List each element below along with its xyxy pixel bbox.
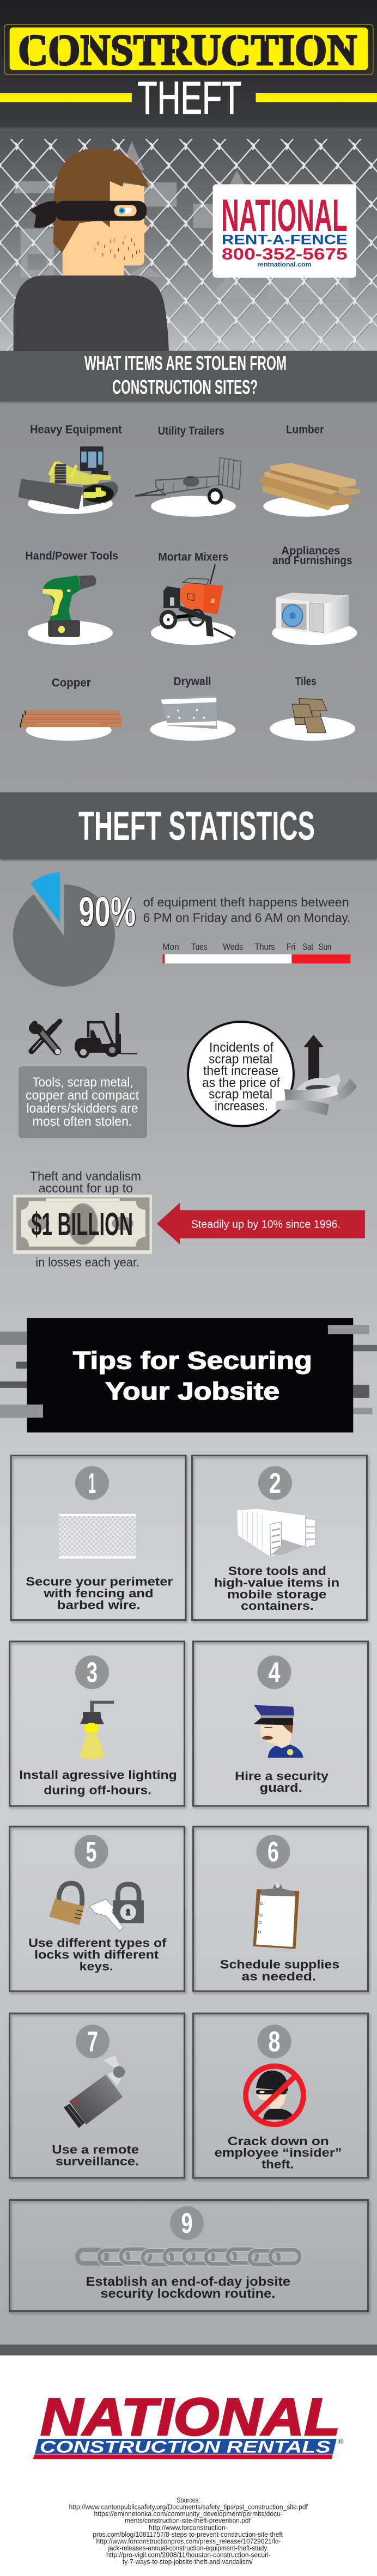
item: utility trailers: Utility Trailers bbox=[158, 425, 224, 437]
tip card 5: locks: locks with different bbox=[34, 1948, 159, 1961]
callout circle: scrap metal: as the price of bbox=[202, 1076, 280, 1090]
item: appliances and furnishings: Appliances bbox=[281, 545, 340, 557]
heading: tips for securing your jobsite bbox=[0, 1318, 377, 1432]
footer band bbox=[0, 2345, 377, 2355]
tip card 4: security guard: Hire a security bbox=[235, 1769, 329, 1783]
week timeline bar: Sat bbox=[302, 942, 313, 952]
tip card 6: schedule supplies: Schedule supplies bbox=[220, 1958, 339, 1971]
statistic text: weekend theft bbox=[143, 896, 350, 925]
sign: National Rent-A-Fence bbox=[213, 184, 356, 278]
tip card 1: fencing: with fencing and bbox=[43, 1586, 154, 1600]
sources: ty-7-ways-to-stop-jobsite-theft-and-vandalism/ bbox=[123, 2557, 253, 2566]
heading: Theft Statistics bbox=[0, 792, 377, 858]
callout: tools most often stolen: Tools, scrap metal, bbox=[33, 1075, 133, 1090]
week timeline bar: Mon bbox=[162, 942, 179, 952]
pie chart: 90%: 90% bbox=[78, 888, 136, 935]
logo: National Construction Rentals: CONSTRUCTION RENTALS bbox=[40, 2438, 331, 2457]
tip card 5: locks: keys. bbox=[80, 1960, 113, 1973]
sources: https://eminnetonka.com/community_development/permits/docu- bbox=[94, 2510, 283, 2518]
callout circle: scrap metal bbox=[188, 1022, 294, 1126]
thief illustration bbox=[14, 148, 169, 351]
tip card 1: fencing bbox=[11, 1455, 186, 1620]
arrow: price up bbox=[303, 1035, 324, 1084]
item: hand/power tools bbox=[25, 550, 118, 645]
callout circle: scrap metal: Incidents of bbox=[209, 1040, 273, 1055]
callout: tools most often stolen: most often stolen. bbox=[33, 1114, 132, 1129]
tip card 4: security guard: guard. bbox=[260, 1781, 302, 1794]
item: drywall: Drywall bbox=[174, 676, 211, 688]
heading: tips for securing your jobsite: Tips for Securing bbox=[73, 1346, 312, 1374]
tip card 3: lighting: during off-hours. bbox=[44, 1783, 151, 1797]
arrow: steadily up: Steadily up by 10% since 1996. bbox=[191, 1218, 340, 1230]
tip card 4: security guard bbox=[193, 1641, 368, 1806]
tip card 2: storage containers: containers. bbox=[241, 1599, 314, 1613]
item: lumber: Lumber bbox=[286, 424, 324, 436]
tip card 5: locks: Use different types of bbox=[28, 1936, 167, 1950]
tip card 6: schedule supplies bbox=[193, 1827, 368, 1991]
tip card 4: security guard: 4 bbox=[268, 1657, 281, 1688]
statistic text: weekend theft: of equipment theft happens between bbox=[143, 896, 349, 909]
text: theft and vandalism bbox=[30, 1169, 141, 1195]
tip card 7: remote surveillance: 7 bbox=[87, 2026, 98, 2058]
banknote: $1 billion: $1 BILLION bbox=[31, 1206, 133, 1242]
item: copper: Copper bbox=[52, 677, 91, 689]
tip card 2: storage containers: Store tools and bbox=[228, 1564, 326, 1578]
tip card 6: schedule supplies: 6 bbox=[267, 1836, 279, 1868]
tip card 1: fencing: 1 bbox=[88, 1468, 96, 1499]
tip card 8: insider theft bbox=[193, 2013, 368, 2178]
text: theft and vandalism: account for up to bbox=[39, 1181, 133, 1195]
text: theft and vandalism: Theft and vandalism bbox=[30, 1169, 141, 1183]
week timeline bar: Weds bbox=[223, 942, 243, 952]
item: mortar mixers bbox=[151, 551, 236, 645]
tip card 9: lockdown routine bbox=[10, 2200, 368, 2311]
tip card 3: lighting: Install agressive lighting bbox=[19, 1768, 177, 1782]
tip card 9: lockdown routine: security lockdown routine. bbox=[100, 2287, 275, 2301]
callout circle: scrap metal: scrap metal bbox=[209, 1052, 272, 1066]
icon: forklift bbox=[75, 1013, 137, 1058]
tip card 8: insider theft: employee “insider” bbox=[215, 2146, 342, 2159]
sources: pros.com/blog/10811757/8-steps-to-prevent-construction-site-theft bbox=[93, 2530, 283, 2538]
icon: scrap metal pile bbox=[275, 1074, 357, 1115]
banknote: $1 billion bbox=[13, 1195, 152, 1254]
sources: ments/construction-site-theft-prevention.pdf bbox=[125, 2517, 251, 2524]
callout: tools most often stolen bbox=[19, 1066, 147, 1138]
heading: What items are stolen: CONSTRUCTION SITES? bbox=[112, 376, 258, 398]
tip card 2: storage containers bbox=[192, 1455, 367, 1620]
header panel bbox=[0, 0, 377, 139]
item: copper bbox=[21, 677, 121, 741]
tip card 8: insider theft: Crack down on bbox=[228, 2134, 329, 2148]
tip card 6: schedule supplies: as needed. bbox=[242, 1969, 316, 1983]
tip card 8: insider theft: theft. bbox=[262, 2158, 294, 2171]
week timeline bar bbox=[162, 942, 350, 963]
tip card 2: storage containers: 2 bbox=[269, 1468, 281, 1499]
callout circle: scrap metal: theft increase bbox=[203, 1064, 278, 1078]
pie chart: 90% bbox=[13, 872, 136, 987]
sources: http://www.forconstructionpros.com/press_release/10729621/lo- bbox=[96, 2537, 281, 2545]
heading: tips for securing your jobsite: Your Jobsite bbox=[105, 1377, 279, 1405]
callout circle: scrap metal: scrap metal bbox=[209, 1087, 272, 1102]
footer white area bbox=[0, 2355, 377, 2576]
item: drywall bbox=[150, 676, 235, 741]
logo: National Construction Rentals: NATIONAL bbox=[40, 2387, 340, 2446]
item: mortar mixers: Mortar Mixers bbox=[158, 551, 228, 564]
tip card 9: lockdown routine: Establish an end-of-day jobsite bbox=[86, 2275, 290, 2288]
item: heavy equipment bbox=[18, 424, 122, 514]
stolen items grid bbox=[18, 424, 360, 741]
week timeline bar: Thurs bbox=[255, 942, 275, 952]
item: tiles bbox=[270, 676, 355, 741]
tip card 3: lighting: 3 bbox=[87, 1657, 98, 1688]
week timeline bar: Fri bbox=[287, 942, 295, 952]
title plate: Construction: CONSTRUCTION bbox=[18, 26, 357, 75]
callout: tools most often stolen: loaders/skidders are bbox=[26, 1101, 138, 1116]
sources: http://www.cantonpublicsafety.org/Documents/safety_tips/pst_construction_site.pdf bbox=[69, 2503, 308, 2511]
tip card 1: fencing: Secure your perimeter bbox=[26, 1574, 173, 1589]
logo: National Construction Rentals: ® bbox=[338, 2438, 344, 2445]
sign: National Rent-A-Fence: rentnational.com bbox=[257, 262, 311, 268]
sign: National Rent-A-Fence: RENT-A-FENCE bbox=[222, 233, 348, 248]
tip card 1: fencing: barbed wire. bbox=[57, 1598, 141, 1611]
icon: chain bbox=[77, 2249, 300, 2264]
icon: wrench and screwdriver bbox=[29, 1021, 60, 1054]
week timeline bar: Tues bbox=[191, 942, 207, 952]
item: appliances and furnishings: and Furnishings bbox=[272, 555, 352, 567]
title: Theft: THEFT bbox=[137, 72, 242, 124]
tip card 5: locks bbox=[10, 1827, 184, 1991]
fence scene bbox=[0, 139, 377, 351]
callout circle: scrap metal: increases. bbox=[215, 1099, 268, 1113]
sign: National Rent-A-Fence: 800-352-5675 bbox=[222, 245, 348, 263]
sources: Sources: bbox=[177, 2496, 200, 2504]
tip card 7: remote surveillance bbox=[10, 2013, 184, 2178]
sources: http://www.forconstruction- bbox=[149, 2523, 228, 2531]
tip card 8: insider theft: 8 bbox=[268, 2026, 280, 2058]
tip card 2: storage containers: high-value items in bbox=[214, 1576, 339, 1589]
sources bbox=[69, 2496, 308, 2566]
tip card 7: remote surveillance: Use a remote bbox=[52, 2142, 139, 2156]
statistic text: weekend theft: 6 PM on Friday and 6 AM on Monday. bbox=[143, 912, 350, 925]
item: utility trailers bbox=[135, 425, 241, 517]
tip card 5: locks: 5 bbox=[86, 1836, 97, 1868]
sources: http://pro-vigil.com/2008/11/houston-construction-securi- bbox=[106, 2551, 271, 2559]
item: tiles: Tiles bbox=[295, 676, 317, 688]
week timeline bar: Sun bbox=[319, 942, 331, 952]
title: Theft bbox=[0, 72, 377, 124]
tip card 2: storage containers: mobile storage bbox=[227, 1588, 326, 1601]
item: hand/power tools: Hand/Power Tools bbox=[25, 550, 118, 563]
sources: jack-releases-annual-construction-equipment-theft-study bbox=[108, 2544, 267, 2552]
tip card 9: lockdown routine: 9 bbox=[181, 2208, 193, 2239]
heading: What items are stolen bbox=[0, 351, 377, 401]
tip card 3: lighting bbox=[10, 1641, 184, 1806]
callout: tools most often stolen: copper and compact bbox=[26, 1088, 139, 1103]
items background bbox=[0, 401, 377, 796]
arrow: steadily up bbox=[157, 1202, 365, 1244]
tip card 7: remote surveillance: surveillance. bbox=[56, 2154, 139, 2168]
text: in losses each year: in losses each year. bbox=[35, 1255, 139, 1269]
page background bbox=[0, 858, 377, 2345]
item: heavy equipment: Heavy Equipment bbox=[30, 424, 122, 436]
item: lumber bbox=[259, 424, 360, 517]
item: appliances and furnishings bbox=[272, 545, 357, 645]
